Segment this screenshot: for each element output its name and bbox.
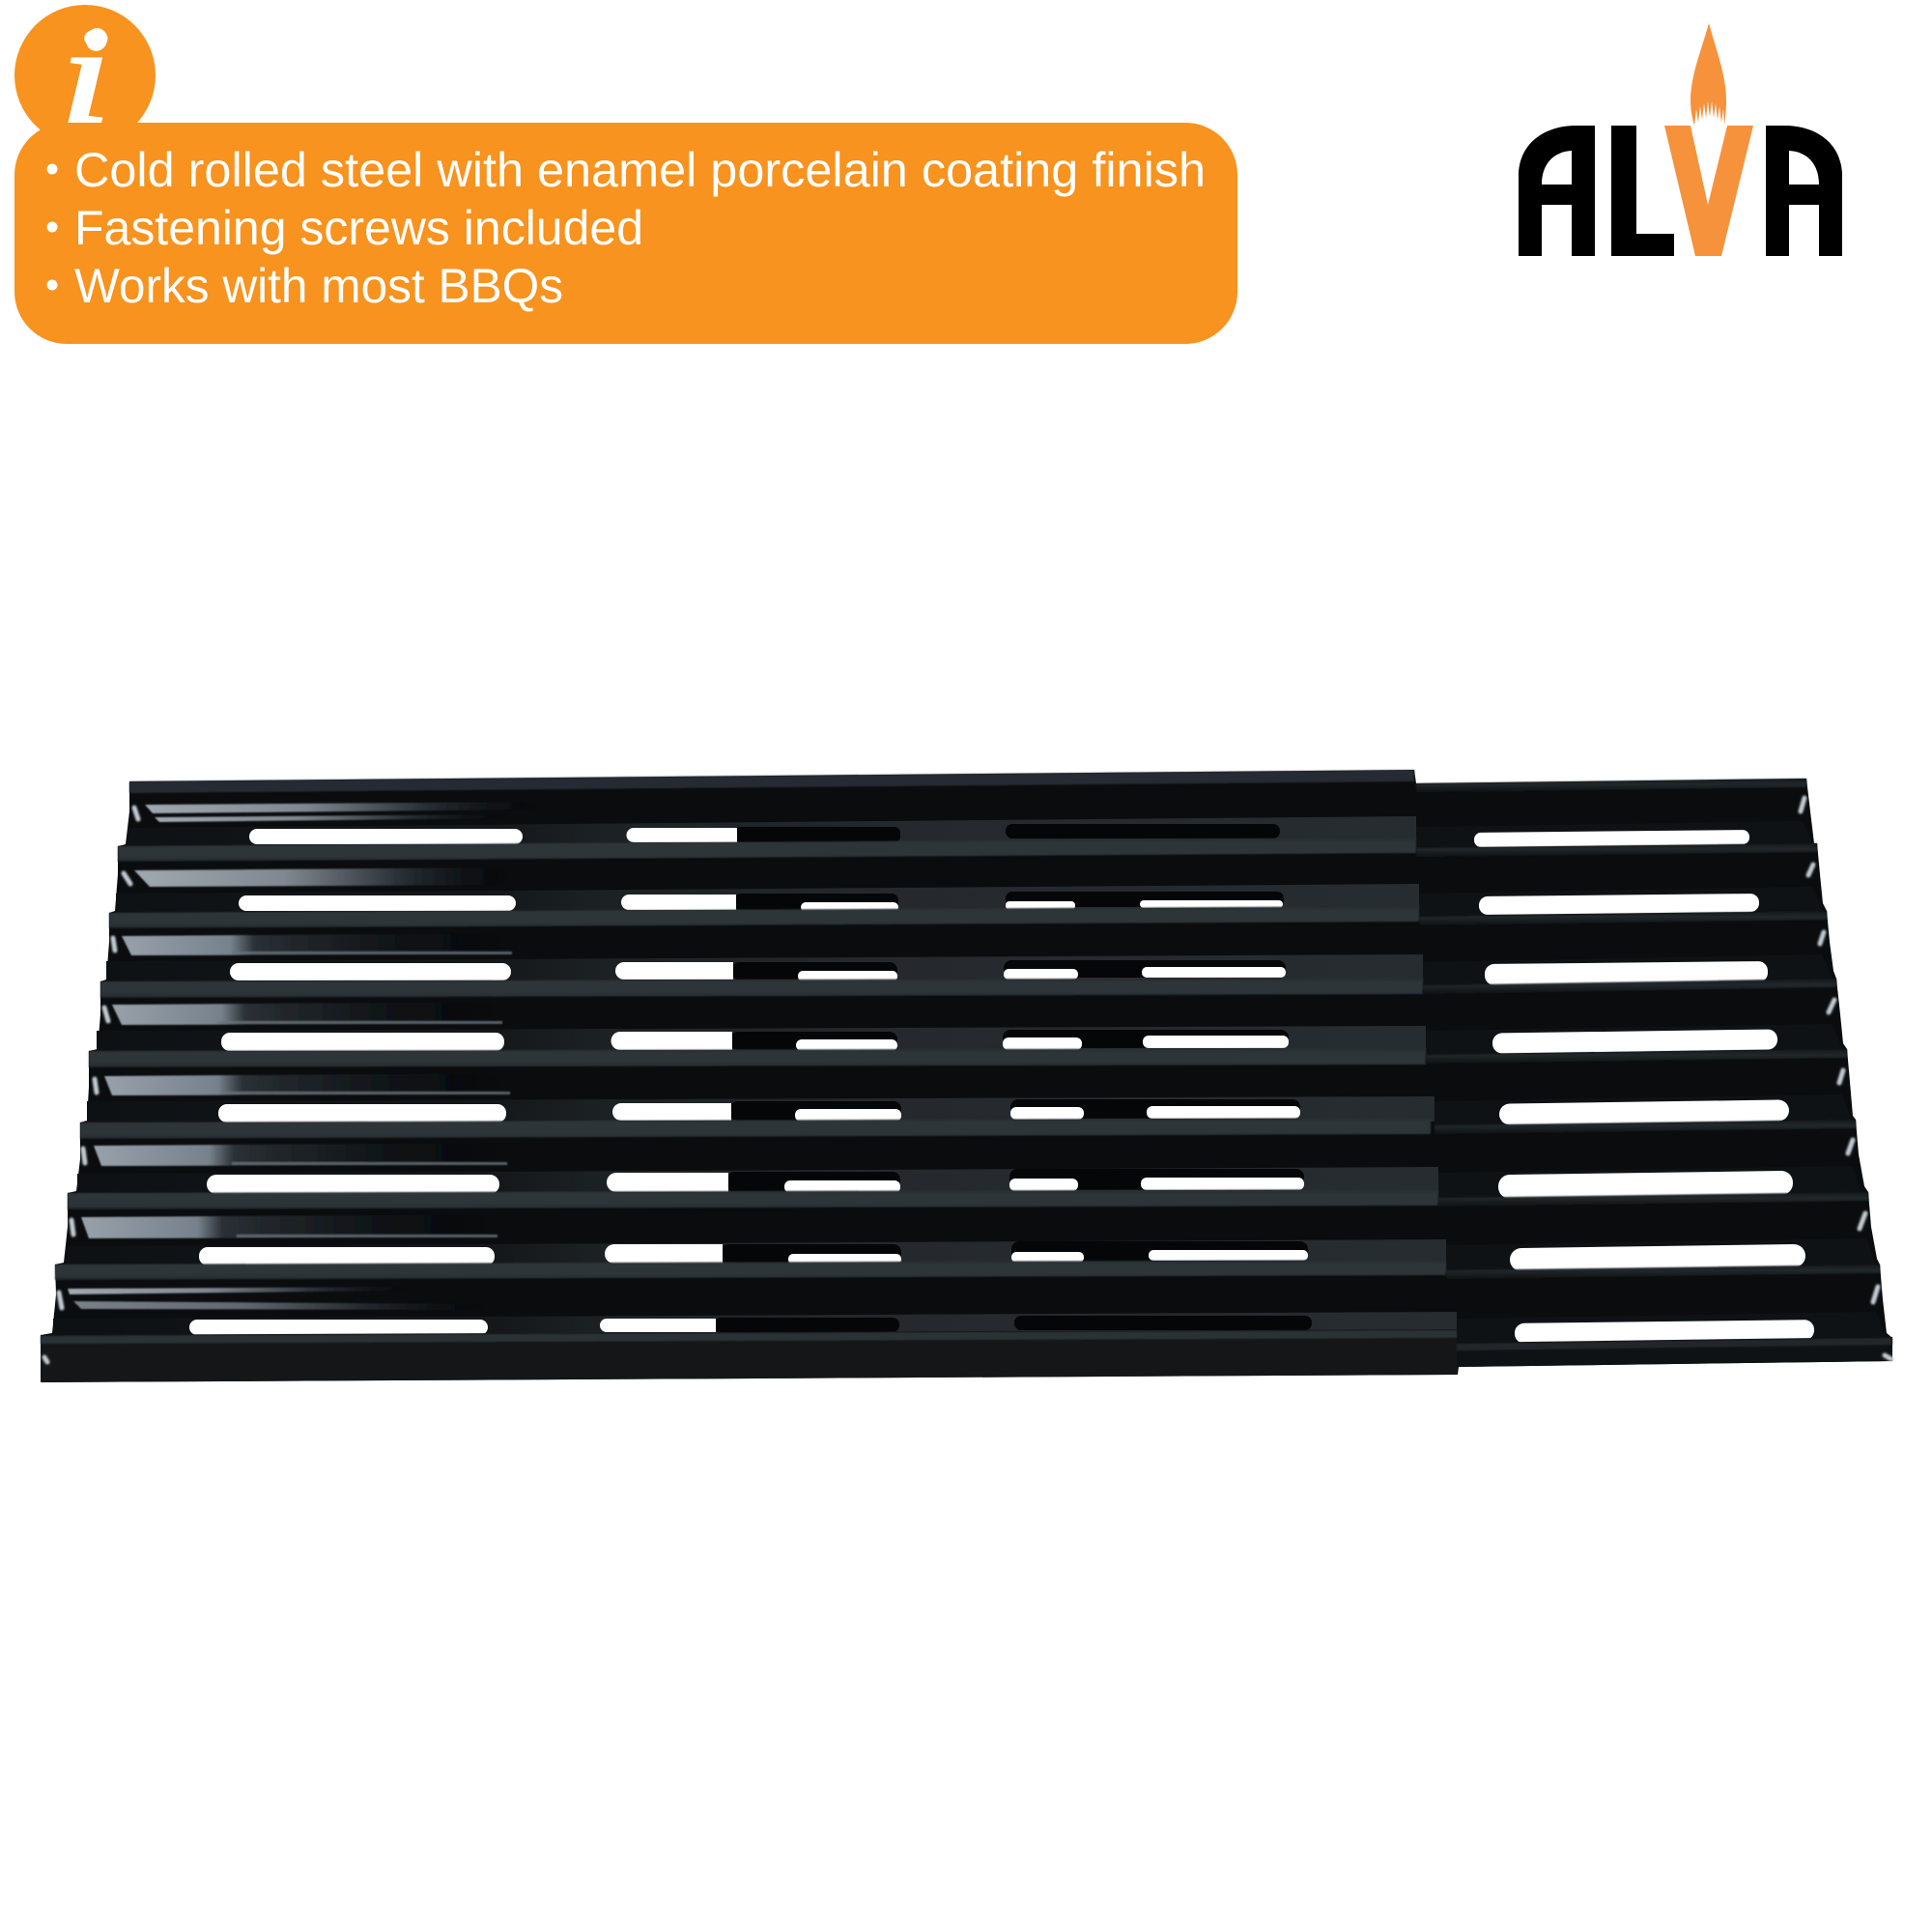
panel background <box>14 123 1237 344</box>
icon: info <box>14 1 156 152</box>
slots row 8 <box>189 1319 1814 1344</box>
logo letter A mirrored <box>1766 126 1842 256</box>
info panel <box>14 1 1237 344</box>
logo letter A <box>1519 126 1595 256</box>
slots row 6 <box>207 1171 1793 1199</box>
front rail: extension <box>1457 1337 1892 1367</box>
metal glints at ends <box>44 798 1891 1362</box>
ridges: main section <box>55 770 1446 1280</box>
logo letter L <box>1611 126 1674 256</box>
streaks along lower curve <box>217 952 512 1237</box>
product: enamel grate <box>41 770 1892 1382</box>
lower flanges with slots <box>53 816 1886 1343</box>
logo: Alva <box>1519 23 1842 256</box>
slots row 5 <box>218 1099 1789 1125</box>
slots row 1 <box>249 828 1749 847</box>
front rail <box>41 1329 1458 1382</box>
slots row 4 <box>221 1029 1777 1054</box>
feature list: Works with most BBQs <box>74 259 563 313</box>
ridges: extension section <box>1416 779 1880 1279</box>
grate silhouette <box>41 770 1892 1382</box>
feature list: Cold rolled steel with enamel porcelain coating finish <box>74 143 1206 197</box>
glossy highlights <box>59 802 541 1362</box>
slots row 3 <box>230 961 1768 985</box>
feature list: Fastening screws included <box>74 201 643 255</box>
feature list <box>46 143 1206 313</box>
logo letter V <box>1664 126 1753 256</box>
icon: flame <box>1690 23 1726 126</box>
slots row 2 <box>239 894 1759 915</box>
slots row 7 <box>199 1244 1805 1271</box>
open slots <box>189 828 1814 1344</box>
icon: info: i <box>60 1 111 152</box>
dark closed slot sections <box>714 824 1312 1332</box>
